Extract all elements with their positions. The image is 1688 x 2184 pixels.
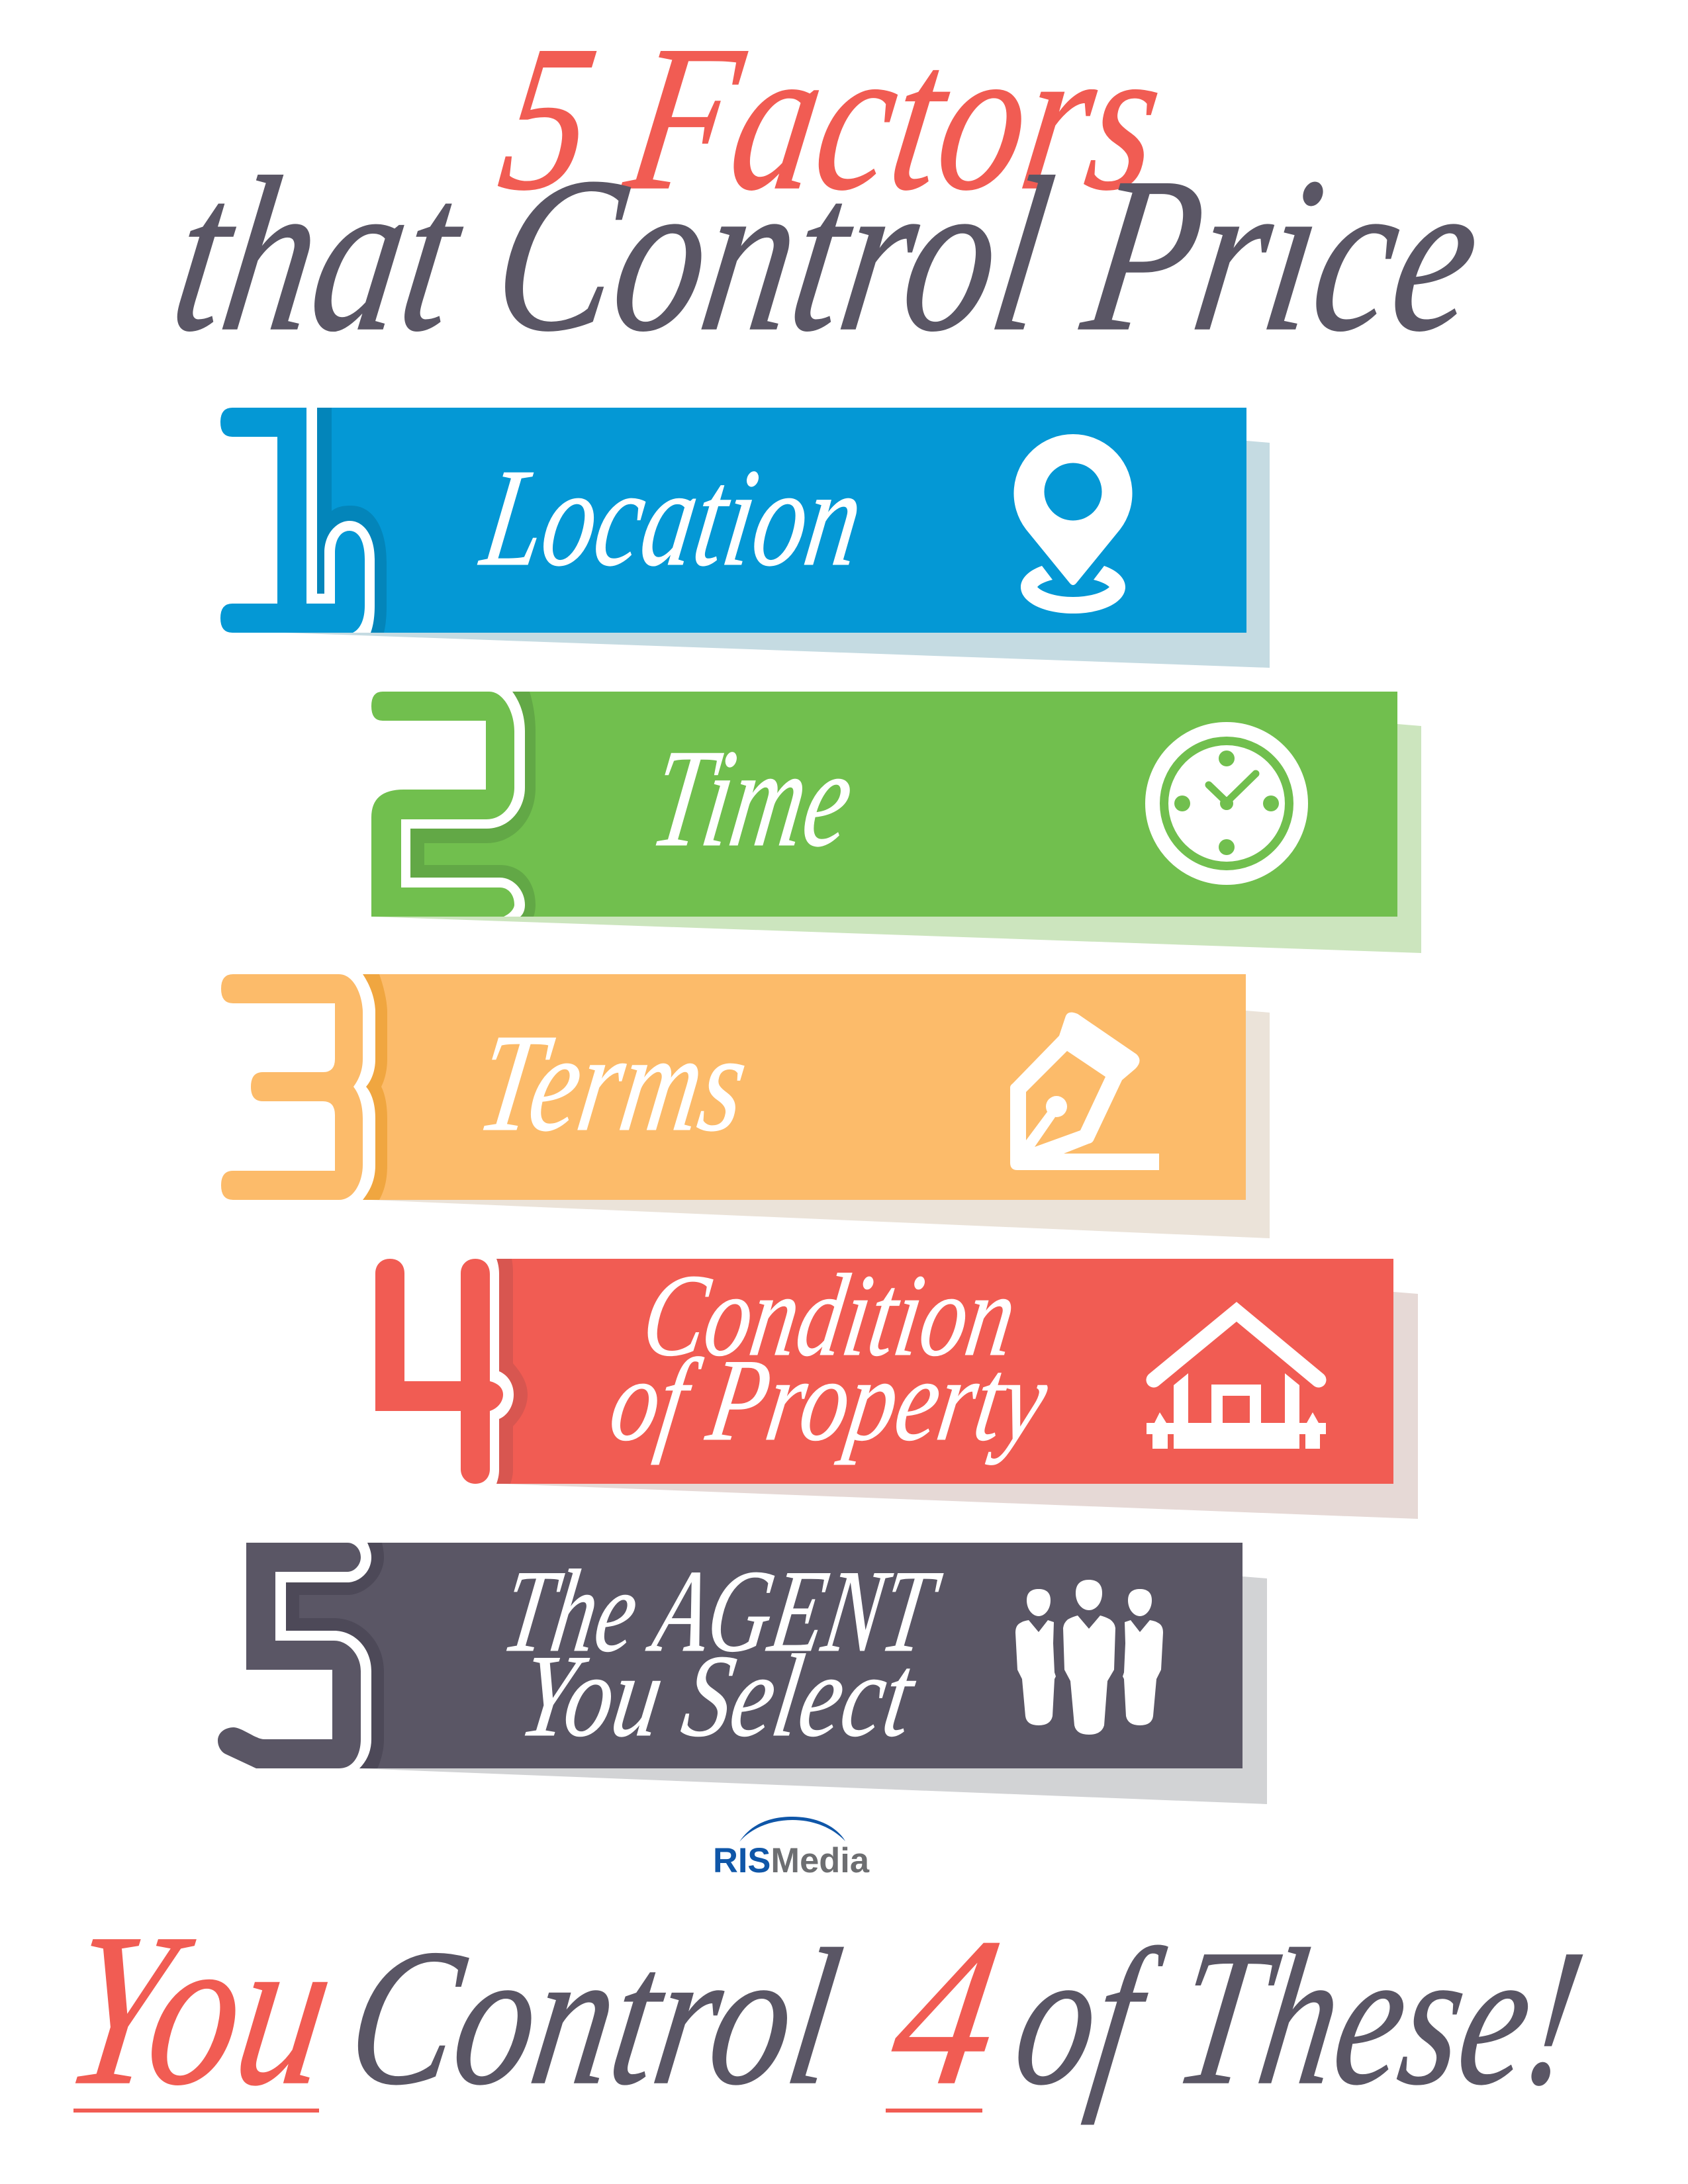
underline: You: [73, 2109, 319, 2113]
logo: RISMedia: [713, 1817, 870, 1880]
title line: 5 Factors: 5 Factors: [488, 3, 1176, 234]
numeral 1 and blue bar: [220, 408, 1246, 633]
panel: factor 2 time: [371, 692, 1421, 953]
icon: clock: [1152, 729, 1301, 878]
word: of: of: [1003, 1909, 1176, 2126]
logo: RISMedia: RISMedia: [713, 1841, 870, 1880]
underline: 4: [886, 2109, 982, 2113]
icon: map pin: [1014, 434, 1132, 614]
label: Condition of Property: Condition: [635, 1250, 1025, 1381]
panel: factor 1 location: [220, 408, 1270, 668]
numeral 3 and orange bar: [221, 974, 1246, 1200]
icon: pen nib: [1010, 1013, 1159, 1170]
bar shadow: [371, 1011, 1270, 1238]
label: Time: Time: [643, 721, 863, 876]
label: Condition of Property: of Property: [602, 1334, 1056, 1465]
panel: factor 4 condition of property: [375, 1250, 1418, 1519]
bar shadow: [285, 441, 1270, 668]
icon: three people: [1015, 1580, 1163, 1735]
label: The AGENT You Select: [495, 1545, 949, 1761]
numeral 4 and red bar: [375, 1259, 1393, 1484]
icon: house with fence: [1147, 1312, 1326, 1449]
numeral: 4: 4: [879, 1894, 1015, 2129]
bar shadow: [503, 1292, 1418, 1519]
label: Terms: Terms: [469, 1005, 757, 1161]
numeral 2 and green bar: [371, 692, 1397, 917]
word: You: You: [52, 1888, 349, 2130]
label: The AGENT You Select: The AGENT: [495, 1545, 949, 1676]
numeral 5 and gray bar: [218, 1543, 1243, 1768]
word: Control: Control: [336, 1909, 853, 2126]
bar shadow: [357, 1576, 1267, 1804]
label: Location: Location: [472, 440, 873, 596]
title: [160, 3, 1495, 377]
footer slogan: [52, 1888, 1597, 2130]
label: Condition of Property: [602, 1250, 1056, 1465]
label: The AGENT You Select: You Select: [512, 1630, 925, 1761]
panel: factor 5 the agent you select: [218, 1543, 1267, 1804]
bar shadow: [371, 724, 1421, 953]
panel: factor 3 terms: [221, 974, 1270, 1238]
